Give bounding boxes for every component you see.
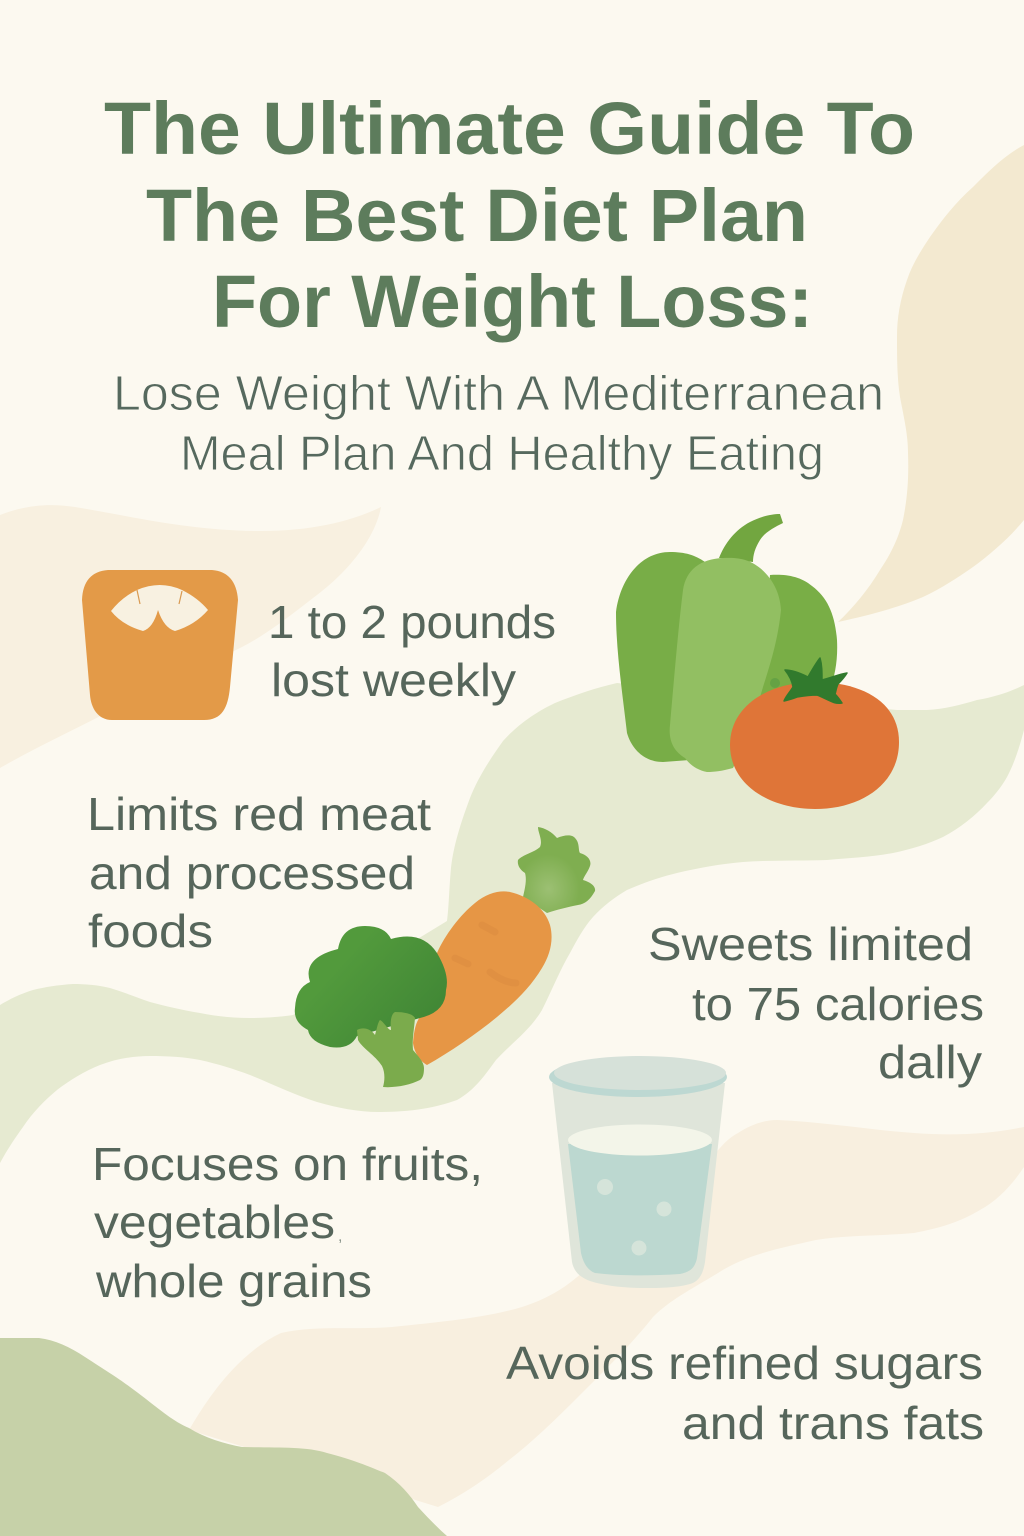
icon: bathroom scale [82, 570, 238, 720]
text: 1 to 2 pounds: 1 to 2 pounds [268, 596, 556, 648]
subtitle [113, 367, 884, 481]
text: sweets limited [648, 918, 984, 1088]
icon: bell pepper and tomato [616, 514, 899, 809]
subtitle: Lose Weight With A Mediterranean [113, 367, 884, 421]
text: limits red meat: Limits red meat [87, 788, 431, 840]
pepper stem [719, 514, 783, 562]
text: 1 to 2 pounds [268, 596, 556, 706]
pepper left lobe [616, 552, 705, 762]
pepper right lobe [760, 575, 837, 700]
text: focuses on fruits: vegetables [94, 1196, 335, 1248]
title [104, 87, 915, 343]
icon: carrot and broccoli [295, 827, 595, 1087]
subtitle: Meal Plan And Healthy Eating [180, 427, 824, 481]
text: limits red meat [87, 788, 431, 957]
text: sweets limited: dally [878, 1036, 982, 1088]
icon: glass of water [549, 1056, 727, 1288]
text: limits red meat: foods [88, 905, 213, 957]
water [568, 1144, 712, 1275]
glass body [552, 1083, 725, 1288]
text: avoids refined sugars: and trans fats [682, 1397, 984, 1449]
text: limits red meat: and processed [89, 847, 415, 899]
glass rim [549, 1057, 727, 1097]
broccoli stem [357, 1012, 424, 1087]
bubbles [597, 1179, 672, 1256]
text: sweets limited: to 75 calories [692, 978, 984, 1030]
tomato [730, 682, 899, 809]
text: focuses on fruits [92, 1138, 483, 1307]
text: avoids refined sugars [506, 1337, 984, 1449]
text: sweets limited: Sweets limited [648, 918, 973, 970]
wave: top right beige [838, 145, 1024, 622]
text: focuses on fruits: , [338, 1228, 342, 1245]
wave: middle green [0, 683, 1024, 1163]
text: focuses on fruits: whole grains [95, 1255, 372, 1307]
title: The Ultimate Guide To [104, 87, 915, 170]
carrot body [413, 891, 552, 1065]
wave: bottom beige [189, 1120, 1024, 1507]
tomato calyx [784, 658, 847, 703]
wave: bottom left green [0, 1338, 447, 1536]
text: avoids refined sugars: Avoids refined sugars [506, 1337, 983, 1389]
broccoli head [295, 926, 447, 1048]
title: For Weight Loss: [212, 260, 813, 343]
title: The Best Diet Plan [146, 174, 808, 257]
pepper centre lobe [670, 558, 781, 772]
carrot leaves [518, 827, 595, 913]
text: focuses on fruits: Focuses on fruits, [92, 1138, 483, 1190]
wave: left beige [0, 505, 381, 768]
text: 1 to 2 pounds: lost weekly [271, 654, 516, 706]
